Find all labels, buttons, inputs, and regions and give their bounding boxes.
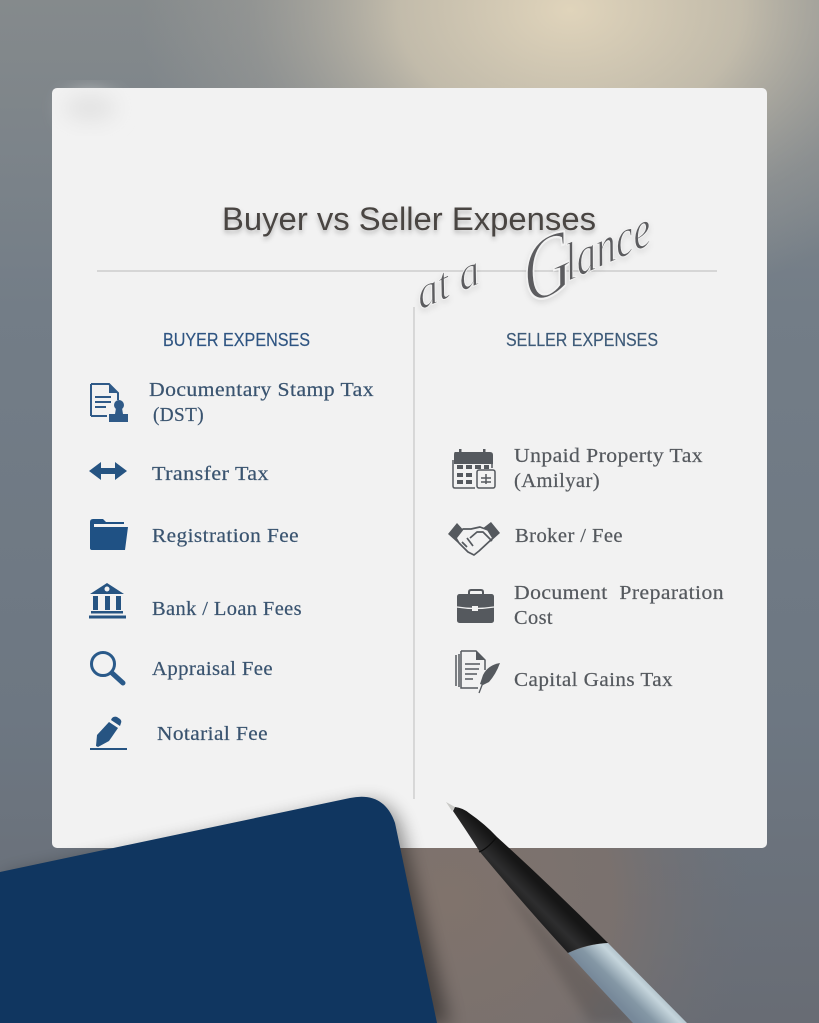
script subtitle	[413, 174, 656, 325]
icon: folder	[90, 519, 128, 550]
icon: calendar	[453, 449, 495, 488]
item: transfer tax	[89, 462, 269, 485]
title: Buyer vs Seller Expenses	[222, 201, 596, 237]
item: registration fee	[90, 519, 299, 550]
item: documentary stamp tax	[91, 379, 374, 426]
icon: double arrow	[89, 462, 127, 480]
item: bank loan fees: Bank / Loan Fees	[152, 598, 302, 620]
item: documentary stamp tax: Documentary Stamp Tax	[149, 379, 374, 401]
item: unpaid property tax: Unpaid Property Tax	[514, 445, 703, 467]
item: broker fee	[448, 522, 623, 555]
pen shadow	[500, 880, 640, 1023]
panel: seller expenses column	[448, 329, 724, 693]
item: appraisal fee	[92, 652, 273, 683]
item: notarial fee: Notarial Fee	[157, 723, 268, 745]
item: documentary stamp tax: (DST)	[153, 404, 204, 426]
pen	[446, 802, 687, 1023]
item: unpaid property tax	[453, 445, 703, 492]
item: appraisal fee: Appraisal Fee	[152, 658, 273, 680]
icon: handshake	[448, 522, 500, 555]
item: capital gains tax: Capital Gains Tax	[514, 669, 673, 691]
item: capital gains tax	[456, 651, 673, 693]
item: notarial fee	[90, 717, 268, 750]
script subtitle: ata	[413, 243, 483, 320]
panel: buyer expenses column	[89, 329, 374, 750]
item: registration fee: Registration Fee	[152, 525, 299, 547]
icon: fountain pen	[90, 717, 127, 750]
navy notebook	[0, 797, 437, 1023]
notebook shadow	[5, 802, 450, 1023]
icon: briefcase	[457, 590, 494, 623]
icon: bank	[89, 583, 126, 618]
pen silver barrel	[568, 943, 687, 1023]
script subtitle: G	[516, 209, 577, 325]
icon: document with quill	[456, 651, 500, 693]
icon: magnifying glass	[92, 652, 123, 683]
item: unpaid property tax: (Amilyar)	[514, 470, 600, 492]
buyer heading: BUYER EXPENSES	[163, 329, 310, 350]
icon: document with stamp	[91, 384, 128, 422]
item: document preparation cost	[457, 582, 724, 629]
script subtitle: lance	[561, 198, 654, 293]
pen nib	[446, 802, 455, 811]
item: transfer tax: Transfer Tax	[152, 463, 269, 485]
seller heading: SELLER EXPENSES	[506, 329, 658, 350]
item: document preparation cost: Cost	[514, 607, 553, 629]
item: document preparation cost: Document Preparation	[514, 582, 724, 604]
pen black grip	[453, 807, 608, 953]
panel: paper card	[52, 88, 767, 848]
item: broker fee: Broker / Fee	[515, 525, 623, 547]
item: bank loan fees	[89, 583, 302, 620]
divider lines	[97, 271, 717, 799]
